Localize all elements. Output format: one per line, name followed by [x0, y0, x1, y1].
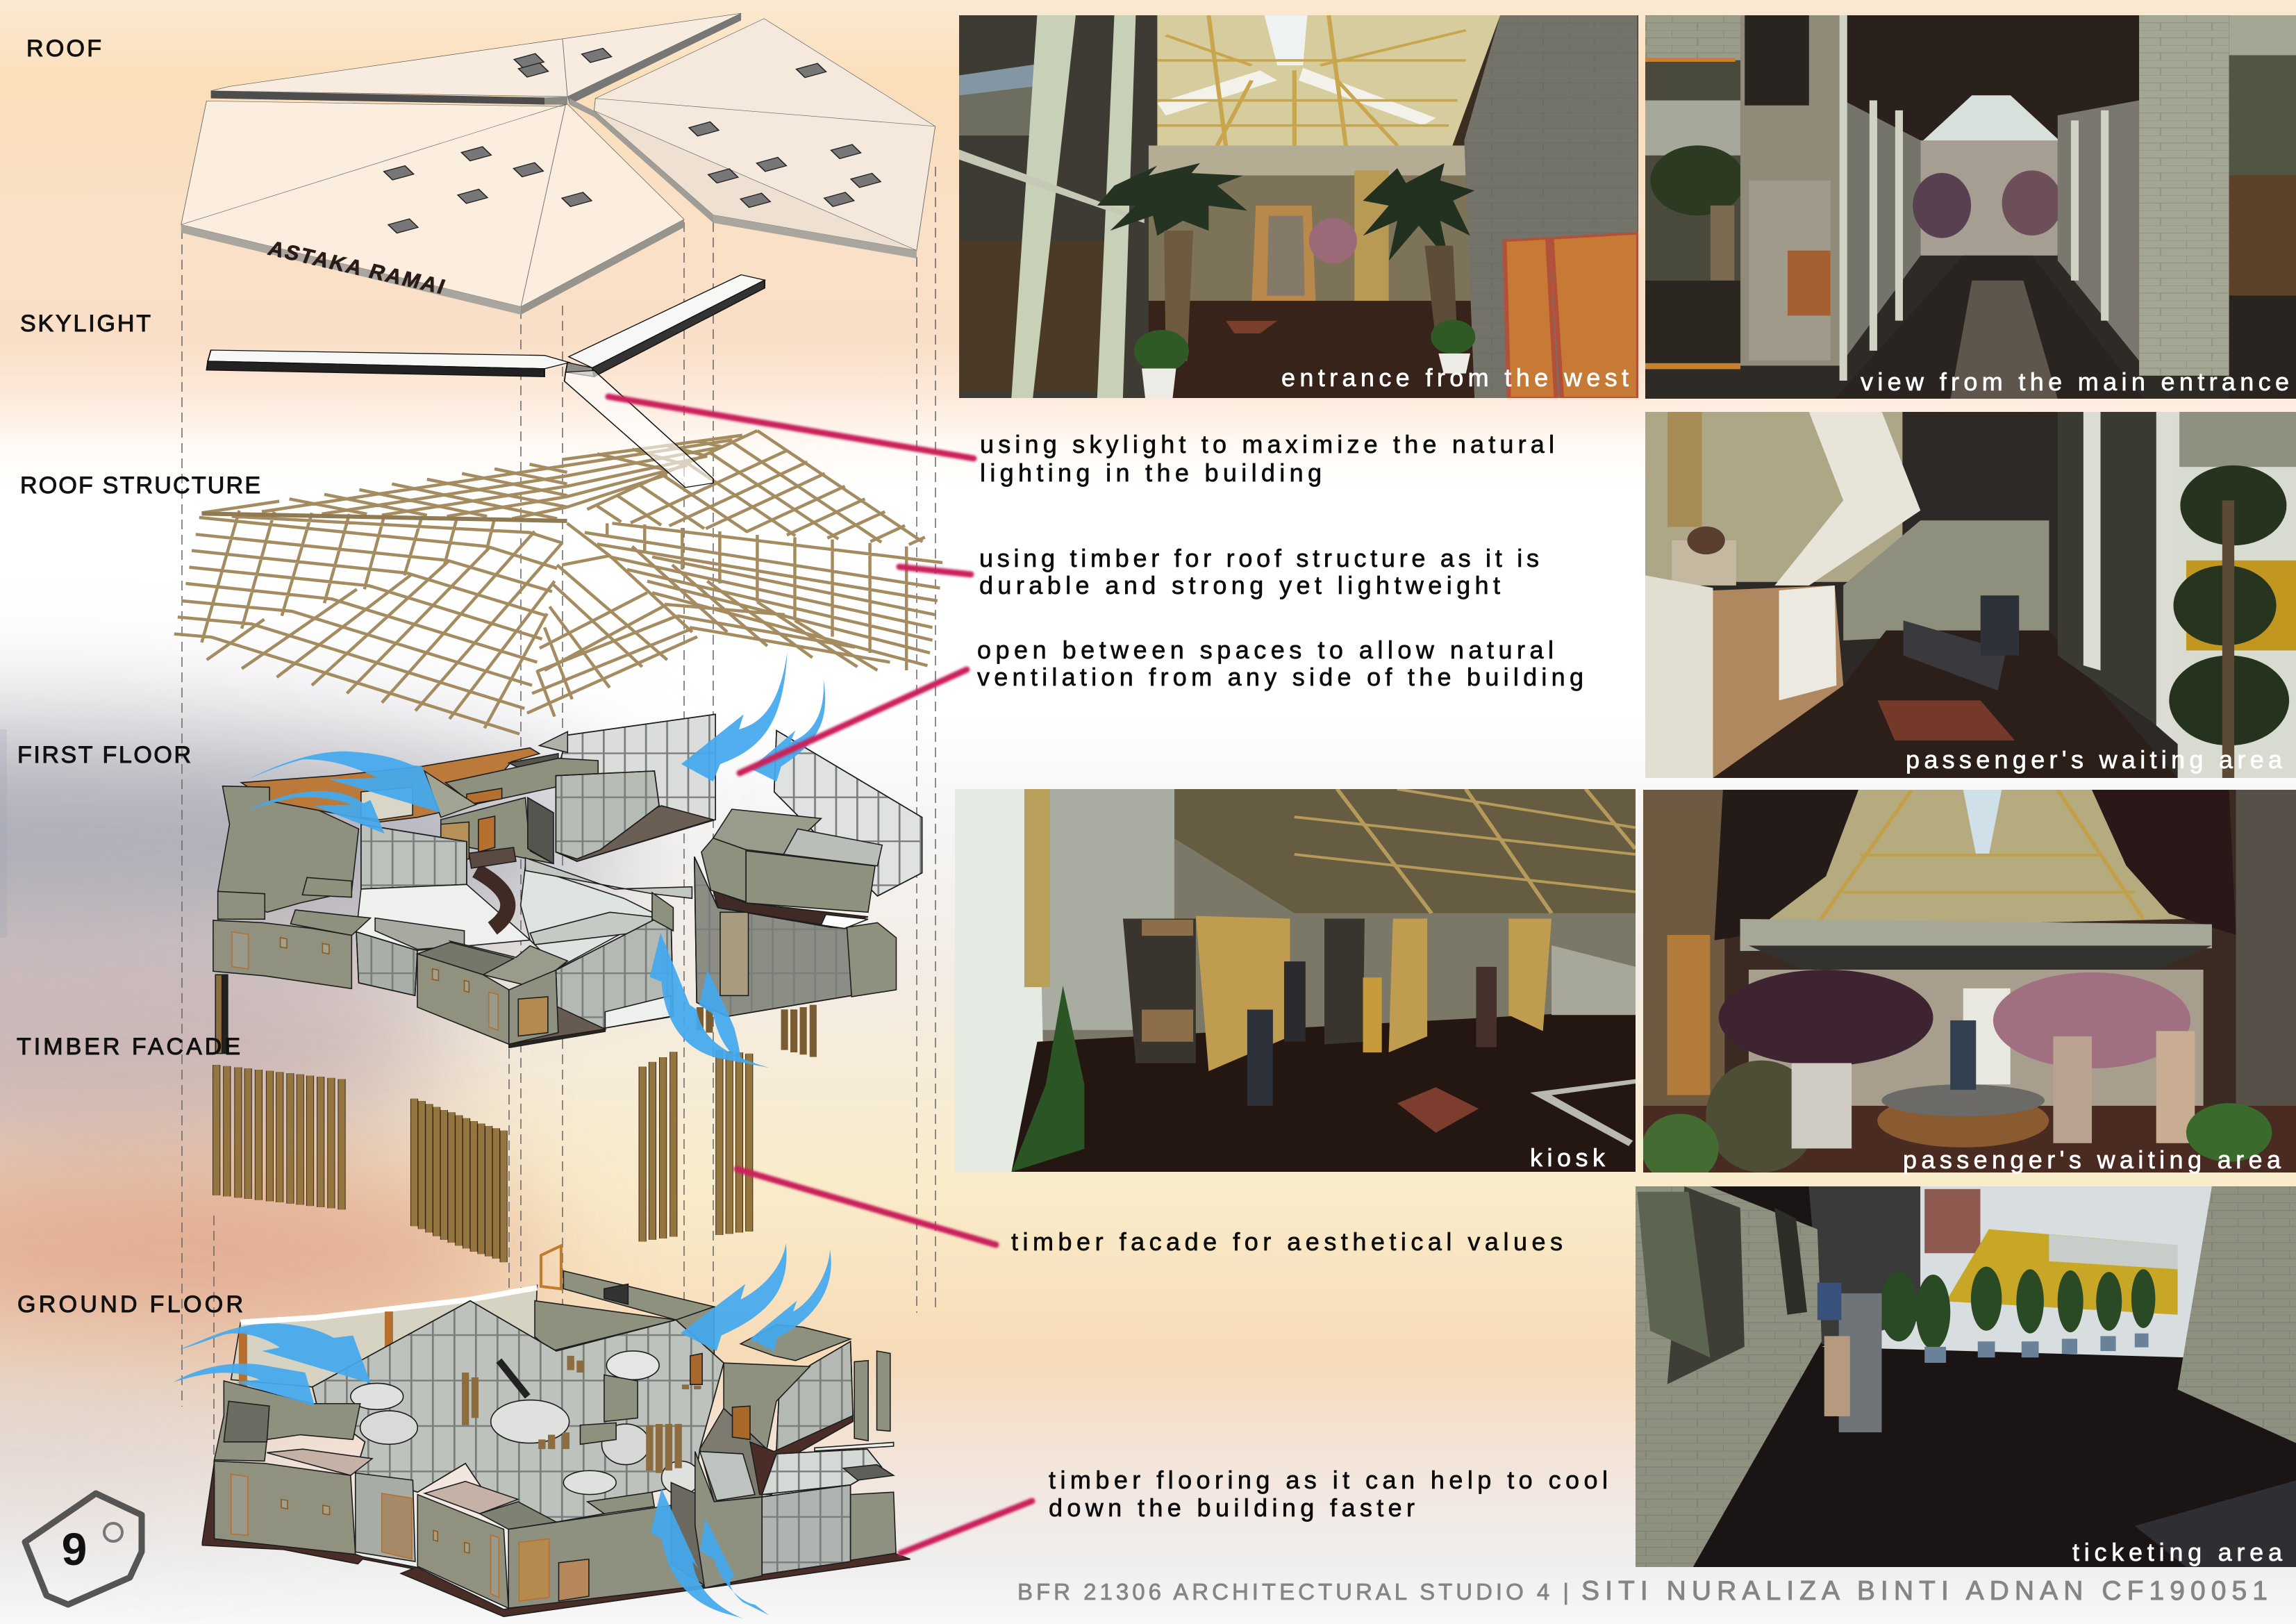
ground floor slab: [202, 1462, 910, 1616]
annotation: timber flooring: [1049, 1466, 1608, 1522]
blue airflow arrows: ground floor: [174, 1243, 831, 1618]
footer credit: [1017, 1576, 2268, 1606]
layer labels: ROOF: [26, 35, 101, 62]
first floor model: [213, 714, 922, 1057]
photo: passenger's waiting area (reception): [1645, 412, 2296, 778]
ground floor model: [202, 1245, 910, 1616]
page number tag badge: 9: [62, 1523, 87, 1575]
photo: entrance from the west: [959, 15, 1638, 398]
layer labels: FIRST FLOOR: [17, 742, 191, 768]
layer labels: SKYLIGHT: [20, 310, 151, 337]
caption: passenger's waiting area: [1906, 745, 2283, 774]
roof skylight openings: [384, 49, 881, 233]
caption: view from the main entrance: [1861, 367, 2289, 396]
ground floor right back block: [671, 1341, 853, 1588]
annotation: ventilation: [977, 636, 1583, 691]
first floor right block: [694, 731, 922, 1016]
caption: entrance from the west: [1281, 363, 1629, 392]
photo: passenger's waiting area (atrium): [1642, 790, 2296, 1183]
dashed projection lines: [182, 167, 935, 1528]
caption: ticketing area: [2072, 1538, 2283, 1566]
first floor left column: [215, 975, 228, 1054]
footer credit: BFR 21306 ARCHITECTURAL STUDIO 4 |: [1017, 1579, 1569, 1605]
timber facade slats: [217, 1050, 749, 1262]
footer credit: SITI NURALIZA BINTI ADNAN CF190051: [1581, 1576, 2268, 1606]
annotation: skylight: [980, 430, 1554, 487]
layer labels: GROUND FLOOR: [17, 1291, 243, 1318]
ground floor right block: [695, 1443, 896, 1588]
ground floor back walls: [231, 1245, 890, 1441]
roof sign text: ASTAKA RAMAI: [265, 238, 448, 299]
annotation: timber roof: [979, 544, 1539, 599]
ground floor interior glass and trees: [313, 1301, 724, 1528]
annotation: timber flooring: timber flooring as it can help to cool: [1049, 1466, 1608, 1494]
skylight element: [206, 275, 765, 488]
first floor front block: [417, 893, 673, 1047]
annotation: ventilation: open between spaces to allow natural: [977, 636, 1554, 664]
first floor back glass: [540, 714, 715, 861]
annotation: timber roof: using timber for roof structure as it is: [979, 544, 1539, 572]
photo: view from the main entrance: [1645, 15, 2296, 399]
first floor hanging timber: [700, 1005, 813, 1057]
roof east wedge: [569, 19, 935, 258]
roof north-west wedge: [211, 13, 741, 105]
photo: kiosk: [955, 789, 1636, 1172]
first floor atrium: [356, 825, 692, 995]
annotation: timber flooring: down the building faster: [1049, 1493, 1415, 1522]
annotation: skylight: using skylight to maximize the natural: [980, 430, 1554, 458]
first floor back rooms: [241, 748, 659, 863]
annotation: timber facade: timber facade for aesthetical values: [1011, 1227, 1563, 1256]
annotation: skylight: lighting in the building: [980, 458, 1322, 487]
layer labels: [17, 35, 260, 1318]
layer labels: TIMBER FACADE: [17, 1034, 240, 1060]
first floor left block: [213, 786, 370, 988]
caption: kiosk: [1530, 1143, 1606, 1172]
photo: ticketing area: [1636, 1186, 2296, 1567]
page number tag badge: [25, 1493, 142, 1605]
annotation: ventilation: ventilation from any side of the building: [977, 663, 1583, 691]
layer labels: ROOF STRUCTURE: [20, 472, 260, 499]
blue airflow arrows: first floor: [246, 652, 825, 1068]
ground floor front block: [417, 1482, 705, 1608]
annotation: timber roof: durable and strong yet lightweight: [979, 571, 1500, 599]
ground floor centre lobby: [356, 1473, 415, 1561]
caption: passenger's waiting area: [1903, 1145, 2281, 1174]
roof structure lattice: [174, 431, 942, 734]
roof south wedge: [181, 101, 684, 315]
ground floor left block: [215, 1381, 372, 1555]
pink leader lines: [608, 397, 1032, 1553]
exploded roof: [181, 13, 935, 315]
